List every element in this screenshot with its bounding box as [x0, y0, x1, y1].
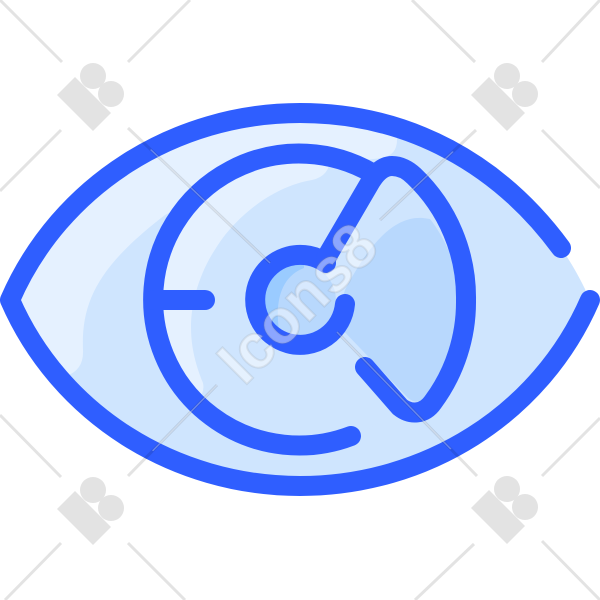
pupil fill — [265, 264, 336, 335]
iris ring outline — [153, 154, 372, 446]
pointer and iris right section outline — [326, 166, 466, 412]
eye upper-left highlight — [21, 123, 397, 374]
watermark logo top right — [471, 63, 538, 131]
iris crescent highlight — [164, 164, 328, 394]
watermark logo bottom right — [471, 476, 538, 544]
iris left tick — [154, 290, 205, 310]
eye outline — [10, 113, 590, 486]
watermark logo top left — [57, 63, 124, 131]
pupil ring — [255, 255, 345, 345]
watermark line highlights inside eye — [150, 149, 454, 451]
iris base fill — [154, 154, 446, 446]
eye base fill — [10, 113, 590, 486]
watermark text: Icons8 — [204, 210, 391, 397]
iris shaded section — [335, 218, 460, 402]
watermark logo bottom left — [57, 477, 124, 545]
